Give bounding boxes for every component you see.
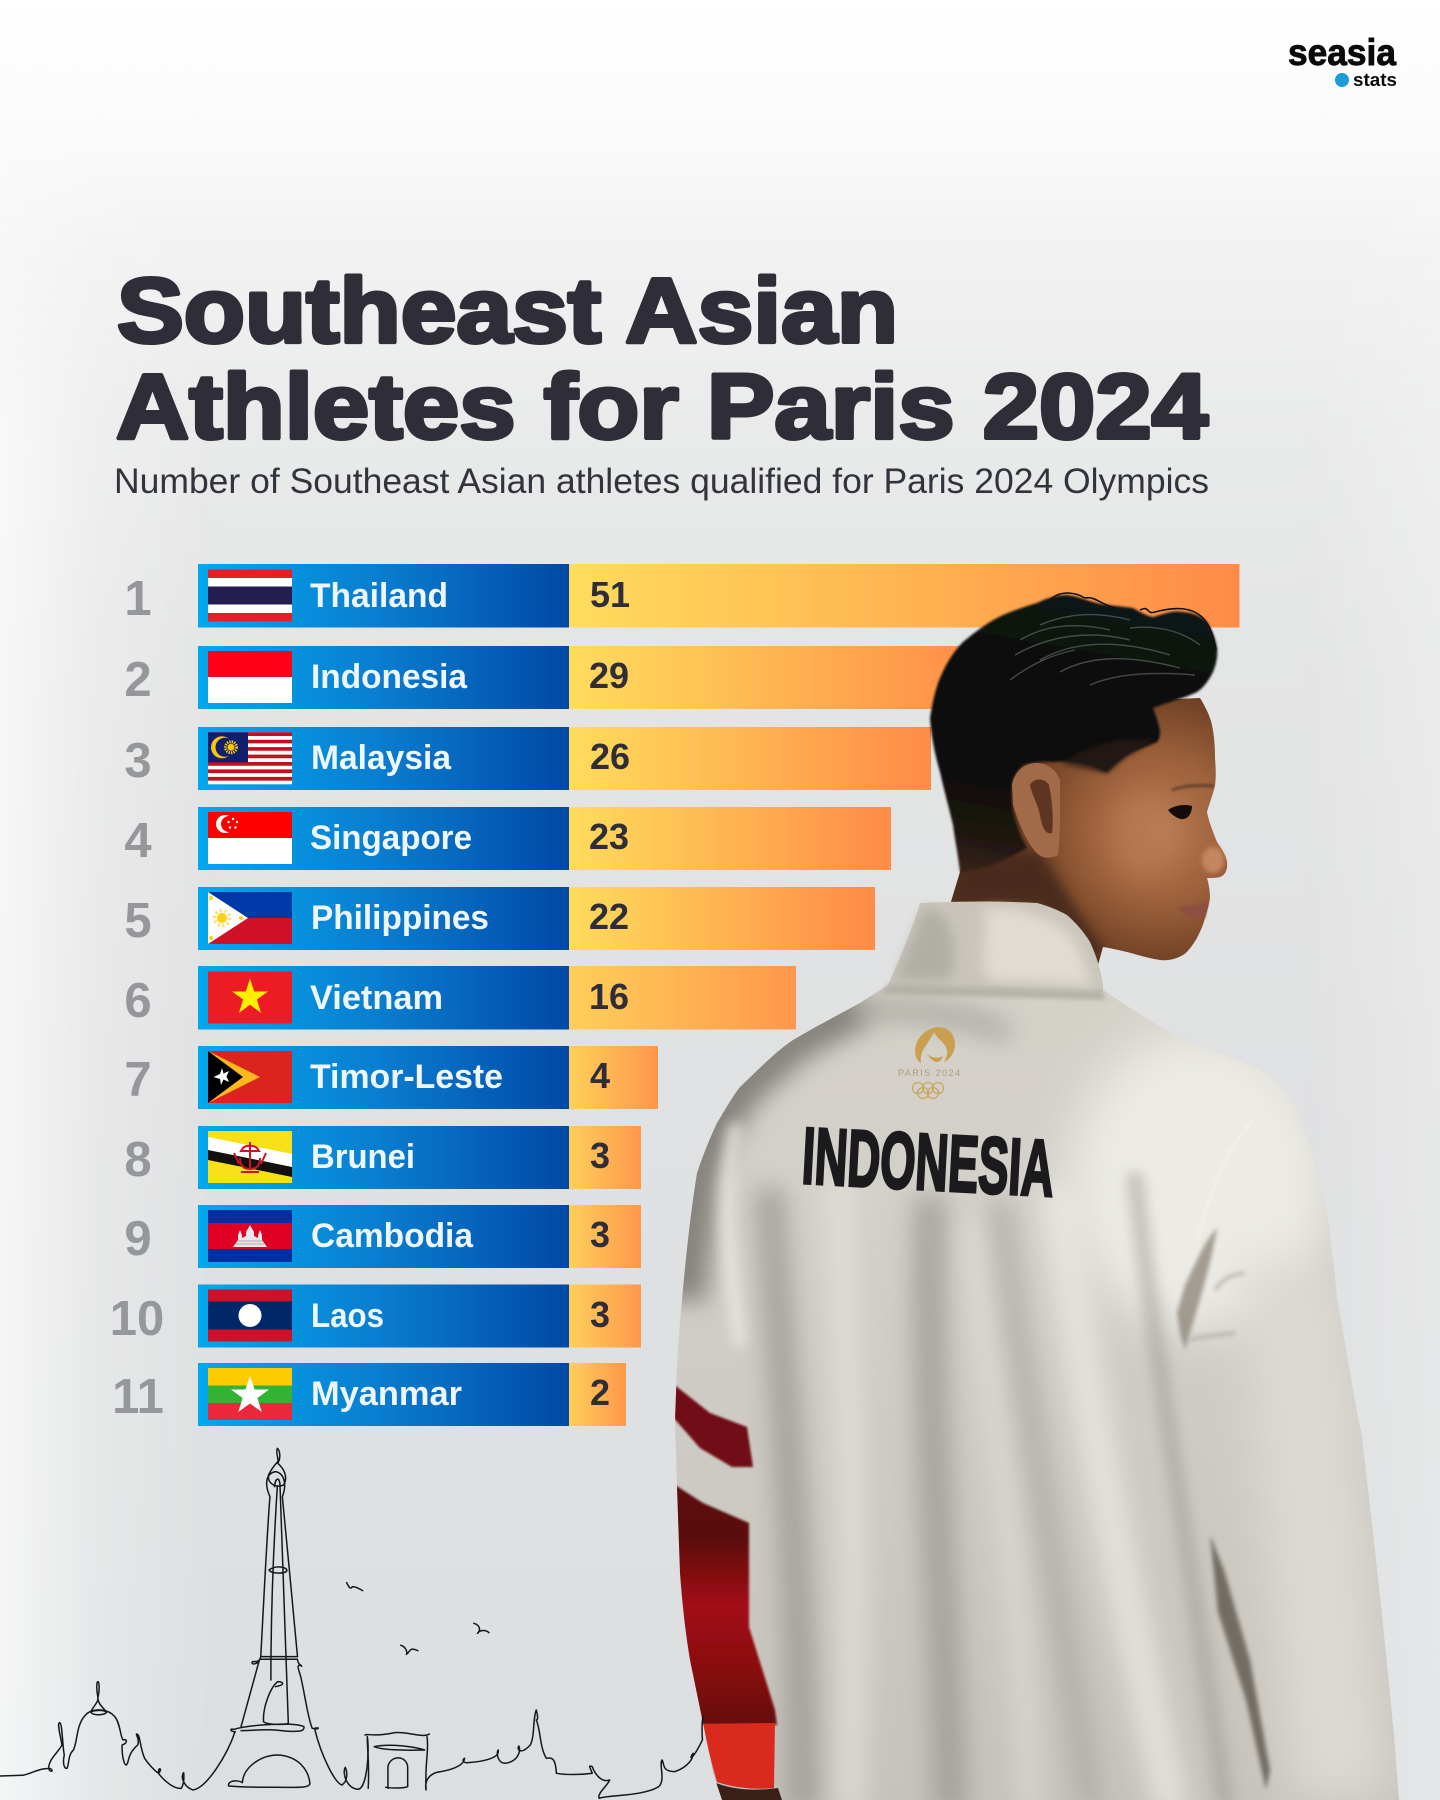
row 11 Myanmar — [112, 1363, 626, 1426]
row 9 Cambodia: 9 — [124, 1212, 152, 1266]
row 11 Myanmar: Myanmar — [311, 1375, 462, 1413]
row 7 Timor-Leste: Timor-Leste — [310, 1058, 503, 1096]
sleeve colour block — [672, 1383, 753, 1467]
row 8 Brunei — [124, 1126, 641, 1189]
title: Southeast Asian — [117, 260, 898, 362]
left shoulder shade — [682, 1003, 860, 1300]
inner ear — [1030, 779, 1053, 833]
neck shadow — [953, 850, 1103, 965]
row 3 Malaysia: Malaysia — [311, 739, 452, 777]
row 9 Cambodia: 3 — [590, 1214, 610, 1255]
logo: seasia stats — [1288, 32, 1397, 90]
row 7 Timor-Leste: 4 — [590, 1055, 610, 1096]
row 6 Vietnam: Vietnam — [310, 979, 443, 1017]
title: Athletes for Paris 2024 — [116, 356, 1208, 458]
eye — [1168, 805, 1192, 819]
row 4 Singapore: 23 — [589, 816, 629, 857]
row 9 Cambodia: Cambodia — [311, 1217, 474, 1255]
subtitle: Number of Southeast Asian athletes qualified for Paris 2024 Olympics — [114, 462, 1209, 501]
row 2 Indonesia: 2 — [124, 653, 152, 707]
row 1 Thailand — [124, 564, 1240, 628]
row 10 Laos: Laos — [311, 1297, 384, 1335]
curly top strands — [1050, 593, 1216, 650]
row 10 Laos: 10 — [110, 1292, 164, 1346]
row 7 Timor-Leste — [124, 1046, 658, 1109]
row 8 Brunei: 3 — [590, 1135, 610, 1176]
cheek highlight — [1109, 790, 1181, 880]
temple fade — [1062, 739, 1155, 774]
emblem: Paris 2024 flame — [898, 1027, 960, 1098]
row 3 Malaysia: 3 — [124, 734, 152, 788]
row 10 Laos — [110, 1284, 641, 1348]
line art: Paris skyline — [0, 1448, 703, 1798]
row 11 Myanmar: 11 — [112, 1370, 164, 1424]
row 6 Vietnam: 6 — [124, 974, 152, 1028]
row 1 Thailand: 51 — [590, 574, 630, 615]
shoulder light right — [1070, 1030, 1330, 1330]
row 9 Cambodia — [124, 1205, 641, 1268]
emblem: Paris 2024 flame: PARIS 2024 — [898, 1068, 960, 1078]
ear — [1012, 763, 1060, 858]
folds — [727, 1010, 1225, 1800]
right sleeve light — [1254, 1306, 1394, 1800]
row 2 Indonesia: Indonesia — [311, 658, 468, 696]
neck and face — [951, 698, 1228, 964]
row 10 Laos: 3 — [590, 1294, 610, 1335]
collar shade — [895, 908, 954, 980]
row 4 Singapore: 4 — [124, 814, 152, 868]
underarm shadow gap — [1210, 1535, 1270, 1790]
row 6 Vietnam — [124, 966, 796, 1030]
row 5 Philippines: Philippines — [311, 899, 489, 937]
jacket lettering: INDONESIA — [800, 1111, 1056, 1213]
logo: seasia stats: seasia — [1288, 32, 1396, 73]
athlete photo — [660, 593, 1420, 1800]
bar chart: athletes by country — [110, 564, 1240, 1426]
row 4 Singapore: Singapore — [310, 819, 472, 857]
row 8 Brunei: Brunei — [311, 1138, 415, 1176]
hair strands — [1010, 615, 1200, 685]
logo: seasia stats: stats — [1353, 70, 1397, 90]
brow — [1172, 785, 1214, 790]
row 2 Indonesia — [124, 646, 989, 709]
row 11 Myanmar: 2 — [590, 1372, 610, 1413]
row 3 Malaysia — [124, 727, 931, 790]
collar band — [880, 984, 1105, 1000]
row 8 Brunei: 8 — [124, 1133, 152, 1187]
row 4 Singapore — [124, 807, 891, 870]
collar — [888, 902, 1103, 992]
underarm crease — [1177, 1228, 1217, 1350]
mouth — [1178, 902, 1208, 919]
row 7 Timor-Leste: 7 — [124, 1053, 152, 1107]
row 2 Indonesia: 29 — [589, 655, 629, 696]
nose highlight — [1202, 847, 1224, 873]
hair — [930, 595, 1217, 872]
row 6 Vietnam: 16 — [589, 976, 629, 1017]
right sleeve seam light — [1197, 1120, 1253, 1240]
title — [116, 260, 1208, 458]
row 1 Thailand: Thailand — [310, 577, 448, 615]
collar light — [983, 908, 1092, 985]
row 5 Philippines — [124, 887, 875, 950]
row 5 Philippines: 5 — [124, 894, 152, 948]
row 5 Philippines: 22 — [589, 896, 629, 937]
row 3 Malaysia: 26 — [590, 736, 630, 777]
row 1 Thailand: 1 — [124, 572, 152, 626]
right sleeve wrinkles — [1190, 1273, 1245, 1340]
jacket body — [660, 980, 1420, 1800]
